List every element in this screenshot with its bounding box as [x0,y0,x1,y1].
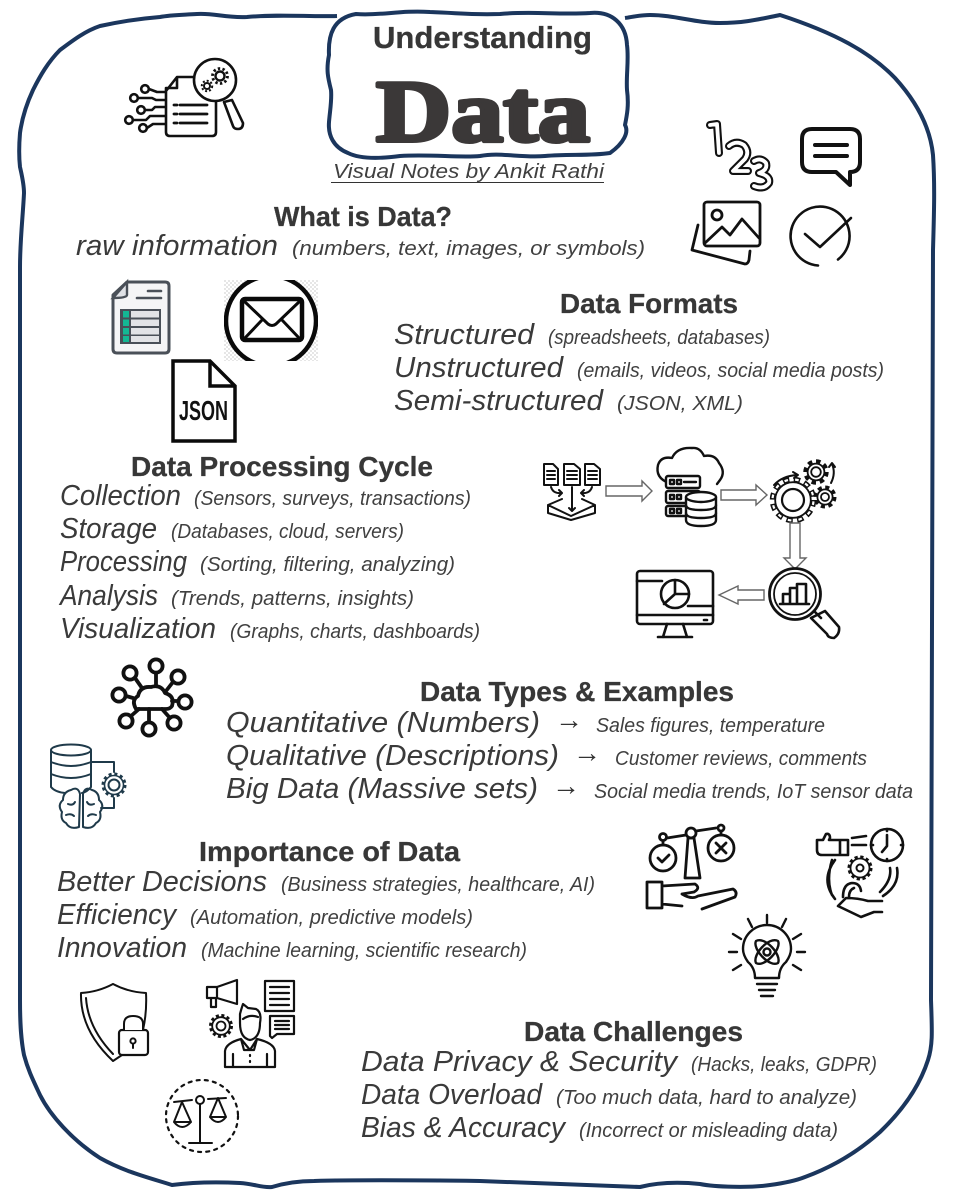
item: Better Decisions [57,866,595,898]
item: Processing [60,546,455,578]
item: Big Data: → [552,770,580,801]
item: Structured: (spreadsheets, databases) [548,327,770,349]
title box outline [328,12,628,158]
icon: speech bubble [802,129,860,185]
item: Quantitative [226,704,825,739]
item: Semi-structured: (JSON, XML) [617,393,743,415]
item: Qualitative: Customer reviews, comments [615,748,867,770]
byline text: Visual Notes by Ankit Rathi [333,161,605,183]
arrow: processing to analysis [784,523,806,569]
heading: Data Challenges: Data Challenges [524,1016,743,1047]
text: raw information definition [76,230,645,262]
item: Innovation [57,932,527,964]
item: Unstructured: (emails, videos, social media posts) [577,360,884,382]
item: Analysis: Analysis [58,580,158,612]
item: Semi-structured: Semi-structured [394,385,604,417]
icon: data document with magnifier [125,59,243,136]
icon: person with megaphone and documents [207,980,294,1067]
item: Data Privacy & Security: (Hacks, leaks, GDPR) [691,1054,877,1076]
text: raw information definition: raw information [76,230,278,262]
heading: Importance of Data: Importance of Data [199,836,460,867]
heading: Data Formats: Data Formats [560,288,738,319]
section: Data Formats [394,288,884,417]
icon: spreadsheet document [113,282,169,353]
item: Collection [60,480,471,512]
section: Importance of Data [57,836,595,964]
icon: JSON file [173,361,235,441]
item: Qualitative: → [573,737,601,768]
item: Collection: (Sensors, surveys, transactions) [194,488,471,510]
icon: cloud network [112,659,192,736]
icon: innovation light bulb with atom [729,915,805,996]
item: Visualization [60,613,480,645]
item: Storage [60,513,404,545]
item: Big Data: Big Data (Massive sets) [226,773,538,805]
item: Semi-structured [394,385,743,417]
title box [328,12,628,161]
diagram: data processing flow [544,448,839,638]
item: Data Privacy & Security [361,1046,877,1078]
item: Innovation: Innovation [57,932,187,964]
item: Quantitative: → [555,704,583,735]
item: Storage: Storage [60,513,157,545]
icon: efficiency thumb clock gear hand [817,829,903,917]
item: Efficiency: Efficiency [57,899,177,931]
icon: numbers 123 [710,124,769,187]
item: Visualization: (Graphs, charts, dashboards) [230,621,480,643]
arrow: storage to processing [721,485,767,505]
icon: shield with padlock [81,984,148,1061]
item: Unstructured [394,352,884,384]
icon: check circle [791,207,851,266]
item: Efficiency: (Automation, predictive models) [190,907,473,929]
item: Qualitative [226,737,867,772]
icon: email in circle [224,280,318,361]
section: Data Processing Cycle [58,451,480,645]
item: Bias & Accuracy: (Incorrect or misleading data) [579,1120,838,1142]
item: Quantitative: Sales figures, temperature [596,715,825,737]
item: Processing: Processing [60,546,187,578]
item: Visualization: Visualization [60,613,216,645]
item: Structured: Structured [394,319,535,351]
item: Data Overload [361,1079,857,1111]
icon: brain database gear [51,744,125,828]
item: Storage: (Databases, cloud, servers) [171,521,404,543]
item: Processing: (Sorting, filtering, analyzing) [200,554,455,576]
section: Data Challenges [361,1016,877,1144]
item: Bias & Accuracy [361,1112,838,1144]
text: raw information definition: (numbers, text, images, or symbols) [292,238,645,260]
item: Data Overload: (Too much data, hard to analyze) [556,1087,857,1109]
icon: justice scale in dashed circle [166,1080,238,1152]
heading: Data Processing Cycle: Data Processing Cycle [131,451,433,482]
item: Qualitative: Qualitative (Descriptions) [226,740,559,772]
arrow: analysis to visualization [719,586,764,604]
item: Unstructured: Unstructured [394,352,564,384]
icon: balance scale on hand [647,825,736,909]
item: Innovation: (Machine learning, scientific research) [201,940,527,962]
item: Efficiency [57,899,473,931]
heading: What is Data?: What is Data? [274,201,452,232]
item: Bias & Accuracy: Bias & Accuracy [361,1112,566,1144]
icon: JSON file: JSON [179,395,228,426]
icon: magnifier with bar chart [770,568,839,638]
item: Better Decisions: (Business strategies, healthcare, AI) [281,874,595,896]
item: Analysis: (Trends, patterns, insights) [171,588,414,610]
icon: cloud server database [657,448,723,526]
heading: Data Types & Examples: Data Types & Examples [420,676,734,707]
icon: gears processing [772,462,835,520]
item: Analysis [58,580,414,612]
section: Data Types & Examples [226,676,913,805]
icon: monitor with pie chart [637,571,713,637]
item: Better Decisions: Better Decisions [57,866,267,898]
icon: collection documents into tray [544,464,600,520]
byline underline [331,182,604,184]
item: Collection: Collection [60,480,181,512]
title: Understanding: Understanding [373,20,592,55]
arrow: collection to storage [606,481,652,501]
item: Structured [394,319,770,351]
item: Data Overload: Data Overload [361,1079,543,1111]
item: Data Privacy & Security: Data Privacy & Security [361,1046,679,1078]
item: Quantitative: Quantitative (Numbers) [226,707,540,739]
icon: image gallery [692,202,760,264]
title: Data: Data [376,64,590,161]
item: Big Data: Social media trends, IoT sensor data [594,781,913,803]
item: Big Data [226,770,913,805]
